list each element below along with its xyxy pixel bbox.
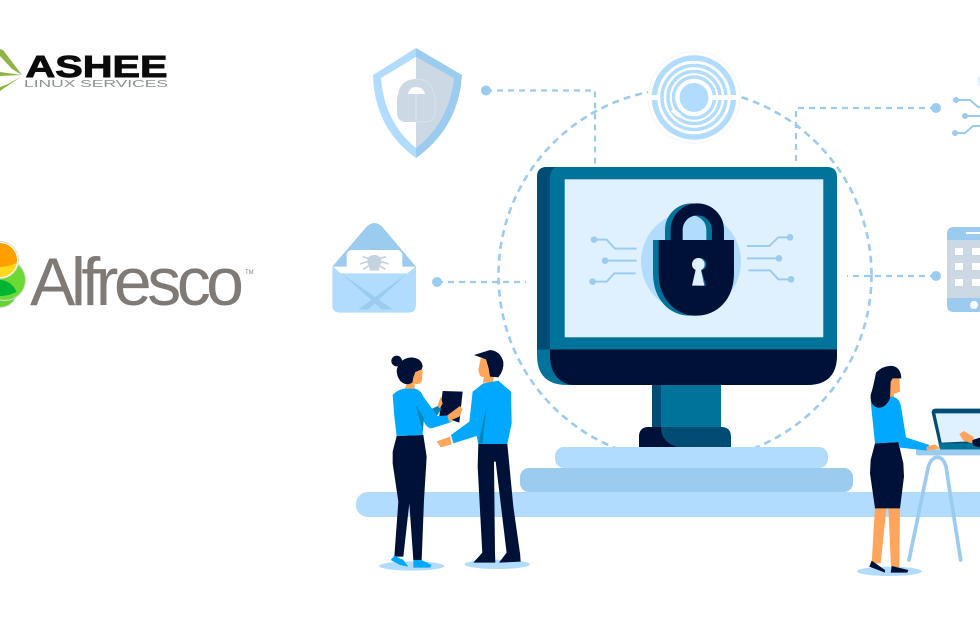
icon: fingerprint circle: [648, 52, 740, 144]
person: man in blue shirt: [437, 350, 530, 569]
padlock: [653, 209, 734, 316]
right circuit traces: [747, 234, 794, 283]
logo: Alfresco: [0, 242, 254, 320]
left circuit traces: [589, 236, 637, 285]
icon: smartphone: [947, 227, 980, 312]
person: woman at laptop: [857, 366, 980, 576]
logo: Ashee Linux Services: [0, 49, 169, 91]
dashed security ring: [498, 88, 872, 462]
logo wordmark: Alfresco: Alfresco: [30, 244, 244, 320]
tablet: [439, 391, 463, 423]
person: woman with tablet: [379, 356, 463, 571]
monitor body: [537, 167, 837, 385]
connector: shield to monitor: [481, 86, 595, 166]
monitor stand: [639, 385, 731, 447]
icon: circuit traces, top right: [952, 77, 980, 136]
logo tagline: Linux Services: LINUX SERVICES: [24, 79, 169, 90]
platform steps: [356, 447, 980, 517]
monitor: [537, 167, 837, 447]
monitor screen: [565, 179, 823, 337]
icon: Alfresco petals: [0, 242, 26, 308]
icon: bug skull: [360, 255, 389, 271]
icon: envelope with malware bug: [332, 223, 416, 313]
icon: shield with padlock: [373, 48, 462, 158]
connector: envelope to ring: [432, 277, 526, 287]
trademark sign: TM: [245, 270, 254, 276]
icon: Ashee green mark: [0, 49, 22, 91]
screen padlock and circuits: [589, 209, 794, 316]
connector: phone to ring: [847, 271, 941, 281]
connector: circuit to monitor: [796, 103, 941, 166]
logo wordmark: ASHEE: ASHEE: [26, 49, 168, 84]
laptop and desk: [909, 409, 980, 560]
